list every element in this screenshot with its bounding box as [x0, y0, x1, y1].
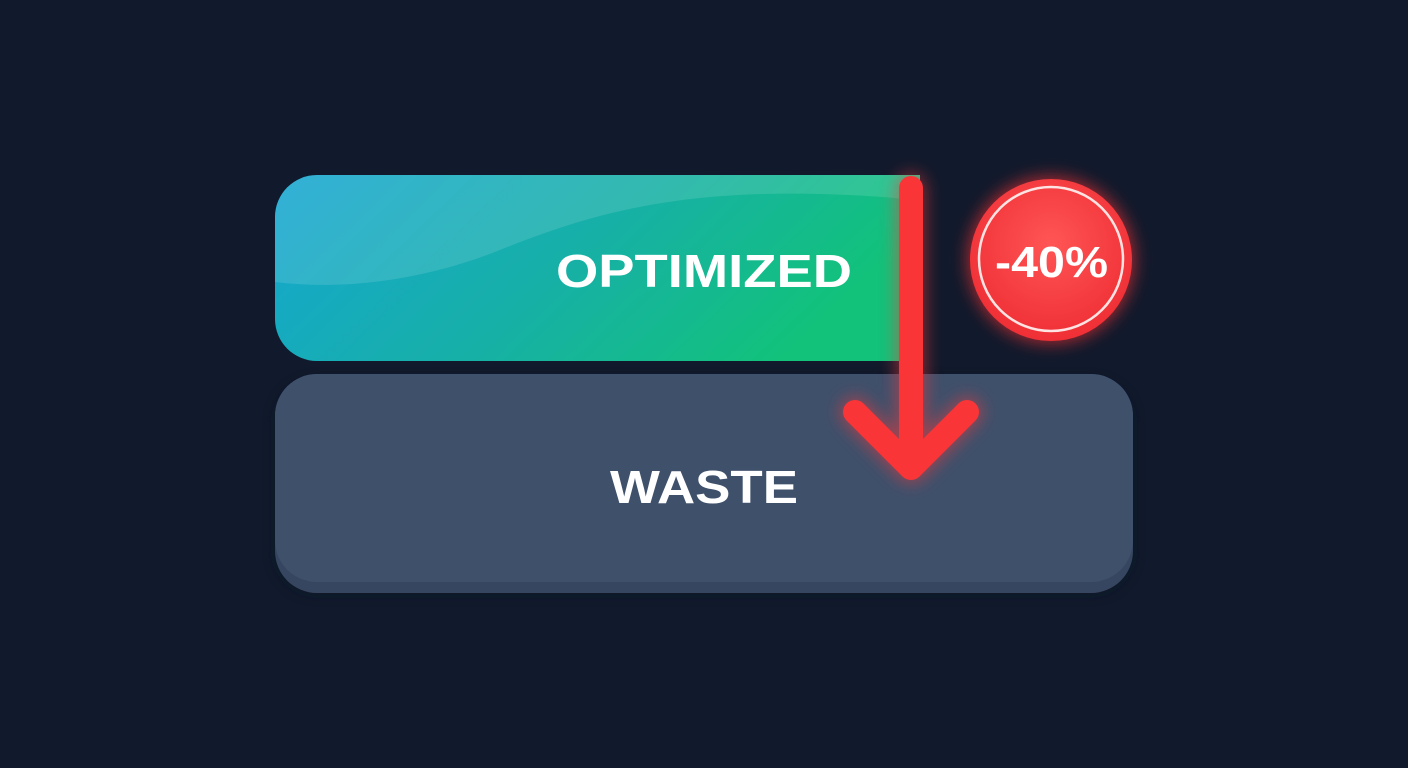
panel: waste bar	[275, 374, 1133, 594]
badge: -40%: -40%	[995, 238, 1108, 287]
panel: optimized bar	[275, 175, 920, 361]
badge: -40%	[967, 176, 1135, 344]
label: optimized: OPTIMIZED	[556, 245, 852, 297]
label: waste: WASTE	[610, 461, 798, 513]
arrow: down	[855, 188, 967, 468]
